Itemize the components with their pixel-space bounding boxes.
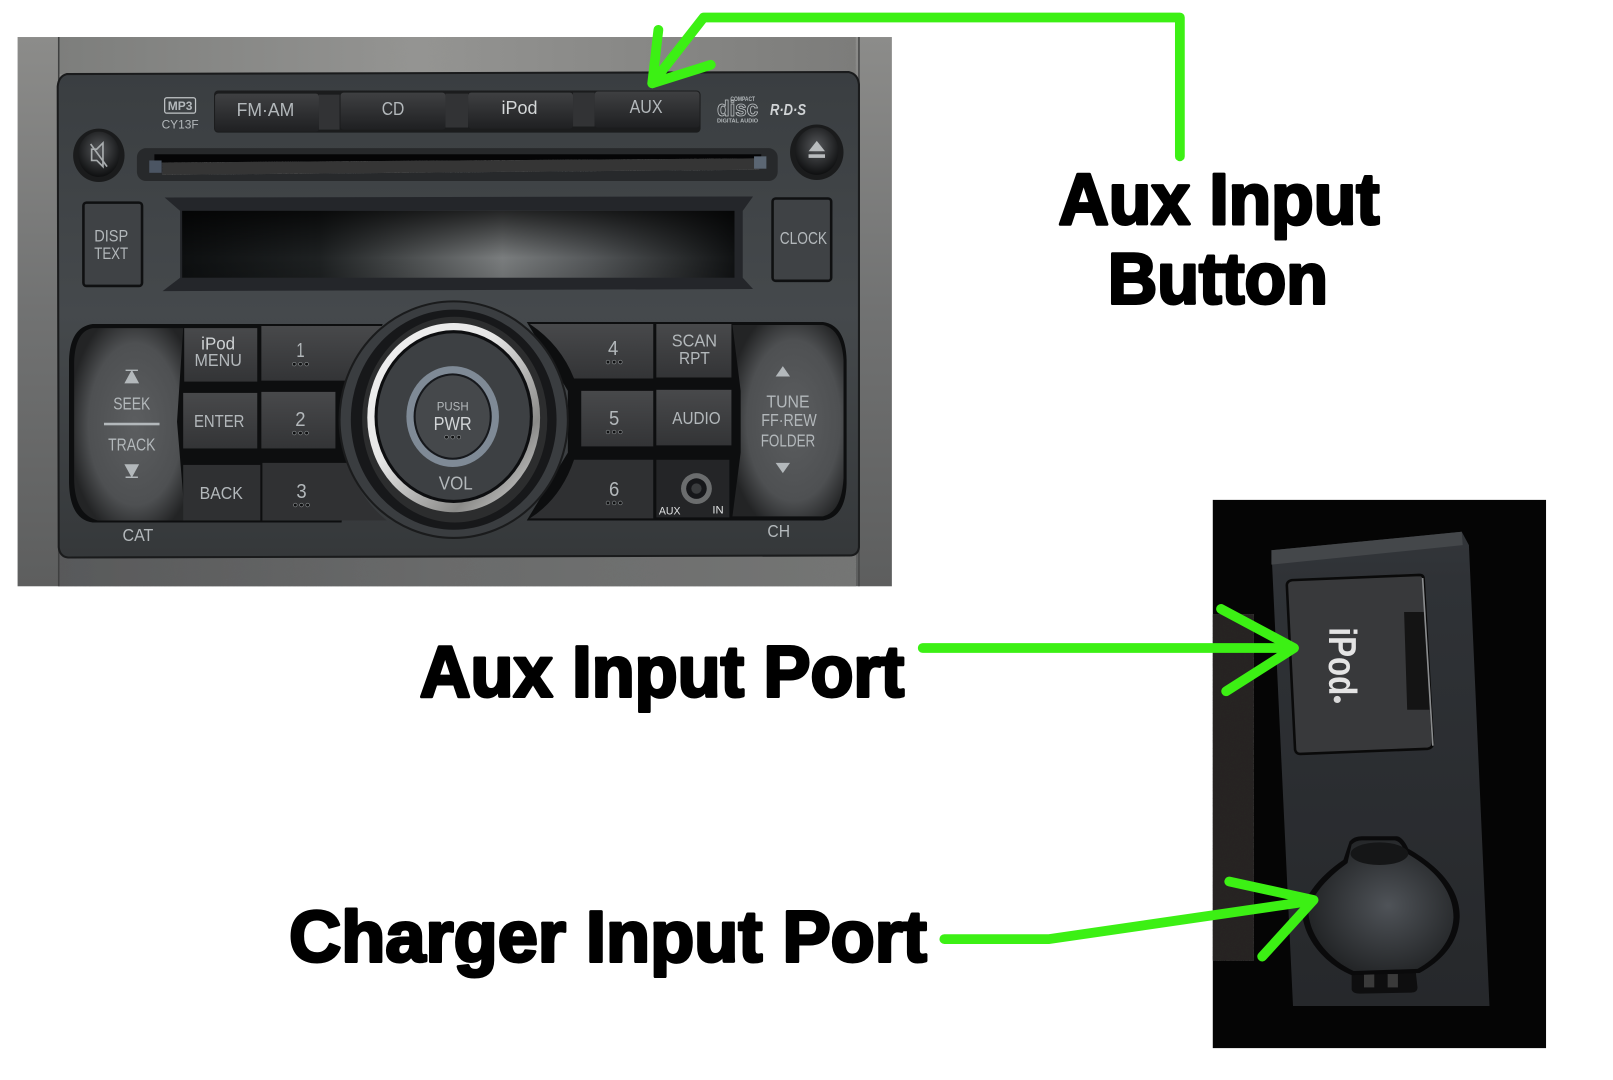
button: iPod MENU <box>184 328 257 382</box>
button: preset 2 <box>261 392 335 448</box>
source buttons row: CD <box>382 98 404 119</box>
heading: Aux Input Button <box>1058 160 1379 319</box>
button: preset 1 <box>261 326 383 381</box>
seek/track rocker <box>74 328 185 520</box>
iPod door: iPod <box>1320 627 1363 695</box>
tune rocker: TUNE <box>766 391 810 411</box>
charger port cap <box>1302 836 1460 994</box>
button: preset 3: 3 <box>296 480 307 503</box>
heading: Aux Input Button: Aux Input <box>1058 160 1379 240</box>
button: SCAN RPT: RPT <box>679 348 710 368</box>
button: AUDIO: AUDIO <box>672 408 721 428</box>
button: preset 4: 4 <box>608 337 618 360</box>
tune rocker: FF·REW <box>761 410 817 430</box>
button: ENTER: ENTER <box>194 411 244 431</box>
button: iPod MENU: iPod <box>201 334 235 354</box>
MP3 badge: CY13F <box>162 118 199 132</box>
MP3 badge: MP3 <box>168 99 193 113</box>
volume knob: VOL <box>439 473 473 494</box>
button: iPod MENU: MENU <box>194 350 242 370</box>
button: SCAN RPT: SCAN <box>672 331 717 351</box>
aux in jack <box>656 460 729 517</box>
label: CH: CH <box>767 521 790 541</box>
carpet strip <box>1213 614 1254 961</box>
tune rocker: FOLDER <box>761 430 815 450</box>
arrow: to aux input port <box>923 609 1294 691</box>
left control cluster <box>69 324 387 523</box>
source buttons row <box>214 91 701 133</box>
button: CLOCK: CLOCK <box>780 228 827 248</box>
aux in jack: IN <box>712 504 724 516</box>
button: BACK <box>183 465 260 520</box>
button: preset 3 <box>262 463 387 520</box>
heading: Aux Input Button: Button <box>1108 239 1328 319</box>
button: AUDIO <box>656 390 731 445</box>
button: preset 4 <box>530 324 653 379</box>
button: preset 6 <box>530 460 653 518</box>
photo: car stereo head unit <box>18 37 892 586</box>
compact disc logo and RDS: disc <box>717 96 758 121</box>
compact disc logo and RDS: COMPACT <box>730 96 755 103</box>
button: preset 6: 6 <box>609 478 619 501</box>
iPod door <box>1287 575 1433 754</box>
photo: center console ports <box>1213 500 1546 1048</box>
button: SCAN RPT <box>656 324 731 377</box>
heading: Charger Input Port: Charger Input Port <box>289 898 927 978</box>
right control cluster <box>527 322 847 520</box>
label: CAT: CAT <box>122 525 154 545</box>
button: preset 1: 1 <box>296 339 305 362</box>
icon: eject button <box>790 124 844 180</box>
compact disc logo and RDS: DIGITAL AUDIO <box>717 118 759 124</box>
button: DISP TEXT: TEXT <box>94 245 128 263</box>
MP3 badge <box>162 98 199 132</box>
arrow: to charger input port <box>944 881 1314 957</box>
tune rocker <box>732 325 844 516</box>
button: preset 5 <box>581 391 653 446</box>
compact disc logo and RDS <box>717 96 807 124</box>
console plate <box>1271 532 1489 1006</box>
volume knob: PWR <box>434 413 472 434</box>
LCD display <box>163 196 753 291</box>
volume knob: PUSH <box>437 399 469 413</box>
aux in jack: AUX <box>659 505 680 517</box>
button: DISP TEXT <box>83 203 142 286</box>
seek/track rocker: TRACK <box>108 435 156 455</box>
compact disc logo and RDS: R·D·S <box>770 102 807 119</box>
arrow: to AUX button <box>652 17 1180 156</box>
button: ENTER <box>183 393 257 448</box>
button: BACK: BACK <box>200 483 243 503</box>
source buttons row: AUX <box>630 96 662 117</box>
icon: mute button <box>73 129 125 182</box>
button: preset 5: 5 <box>609 407 619 430</box>
heading: Aux Input Port: Aux Input Port <box>420 632 904 712</box>
seek/track rocker: SEEK <box>113 393 151 413</box>
button: CLOCK <box>773 199 831 281</box>
button: DISP TEXT: DISP <box>94 228 128 246</box>
volume knob <box>340 301 568 538</box>
button: preset 2: 2 <box>295 408 306 431</box>
source buttons row: iPod <box>502 97 538 118</box>
source buttons row: FM·AM <box>237 99 294 120</box>
faceplate <box>58 72 859 557</box>
CD slot <box>137 148 778 181</box>
